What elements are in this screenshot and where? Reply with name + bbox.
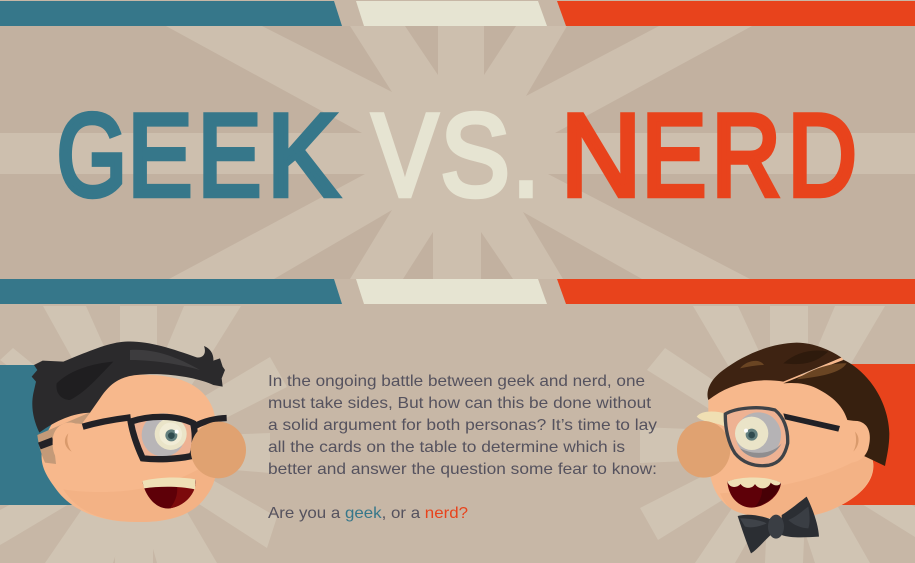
text block: introduction: all the cards on the table to determine which is	[268, 439, 625, 456]
title word: VS.: S	[441, 90, 510, 220]
nerd glasses lens and frame	[725, 408, 788, 466]
nerd face	[708, 373, 873, 518]
title word: VS.: V	[372, 90, 437, 220]
icon: geek character	[32, 341, 246, 522]
text: closing question: Are you a geek, or a nerd?	[268, 505, 468, 522]
nerd inner ear	[853, 432, 859, 452]
geek inner ear	[65, 433, 72, 452]
text block: introduction: must take sides, But how can this be done without	[268, 395, 652, 412]
geek chin shade	[63, 463, 217, 522]
geek nose	[191, 422, 246, 478]
nerd nose	[677, 421, 730, 478]
text block: introduction: In the ongoing battle between geek and nerd, one	[268, 373, 645, 390]
title word: NERD: E	[642, 90, 706, 220]
nerd hair part	[783, 357, 843, 383]
text block: introduction: better and answer the question some fear to know:	[268, 461, 657, 478]
left character sunburst	[0, 306, 287, 563]
teal panel behind geek	[0, 365, 90, 505]
text block: introduction: a solid argument for both personas? It’s time to lay	[268, 417, 657, 434]
nerd hair	[707, 343, 842, 400]
title word: NERD: R	[712, 90, 781, 220]
geek hair	[32, 341, 225, 433]
title word: GEEK: E	[128, 90, 192, 220]
geek eye lens	[131, 417, 195, 459]
bottom tricolour bars	[0, 279, 915, 304]
title word: GEEK: G	[57, 90, 127, 220]
nerd bow tie	[738, 497, 819, 553]
top tricolour bars	[0, 1, 915, 26]
icon: nerd character	[677, 343, 889, 553]
geek ear	[53, 422, 83, 463]
nerd eyebrow	[697, 412, 727, 427]
nerd eye	[735, 412, 782, 458]
title word: GEEK: K	[267, 90, 338, 220]
nerd glasses arm	[783, 413, 840, 432]
title: GEEK VS. NERD	[57, 90, 857, 220]
right character sunburst	[640, 306, 915, 563]
geek glasses frame	[83, 417, 227, 459]
nerd ear	[837, 421, 870, 463]
nerd chin shade	[720, 452, 873, 518]
title word: NERD: D	[788, 90, 857, 220]
panel: title sunburst	[0, 26, 915, 279]
geek eye	[142, 413, 187, 457]
nerd mouth	[727, 477, 781, 508]
geek sideburn	[37, 412, 91, 464]
title word: NERD: N	[561, 90, 641, 220]
geek hair highlight	[56, 362, 113, 400]
geek face	[42, 375, 219, 522]
geek glasses temple	[39, 441, 53, 446]
nerd hair highlights	[740, 361, 764, 368]
geek mouth	[142, 478, 196, 508]
text block: introduction	[268, 373, 657, 522]
title word: GEEK: E	[198, 90, 261, 220]
title word: VS.: .	[513, 90, 539, 220]
red panel behind nerd	[835, 364, 915, 505]
